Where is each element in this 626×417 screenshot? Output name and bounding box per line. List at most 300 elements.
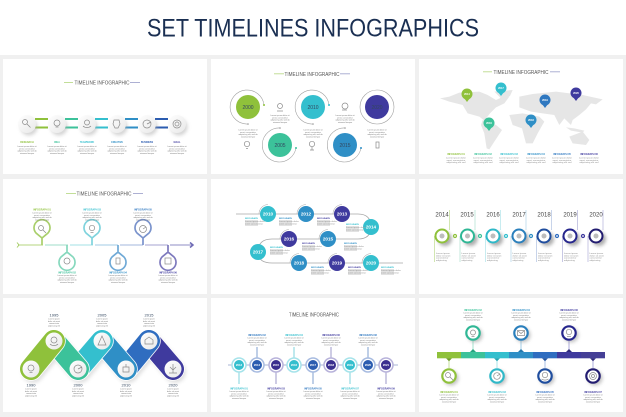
upper text blocks: amet, consectetur — [513, 314, 529, 317]
map text blocks: INFOGRAPH 06 — [580, 153, 599, 156]
pin text blocks: adipiscing elit, sed do — [158, 279, 178, 282]
text blocks — [17, 145, 187, 155]
lower years and text — [25, 382, 179, 397]
ring text blocks: Lorem ipsum — [564, 253, 578, 255]
labels: GOAL — [174, 141, 181, 144]
lower text blocks: eiusmod tempor — [269, 397, 284, 400]
2010 — [301, 95, 325, 119]
2005 — [268, 133, 292, 157]
pin text blocks: Lorem ipsum dolor sit — [133, 212, 153, 214]
lower text blocks: eiusmod tempor — [343, 397, 358, 400]
lower text blocks — [439, 391, 603, 403]
upper years and text: adipiscing elit — [96, 324, 108, 327]
labels: CREATIVE — [111, 141, 123, 144]
upper text blocks: eiusmod tempor — [466, 318, 481, 321]
winding text blocks: amet consectetur — [279, 222, 297, 226]
text blocks: adipiscing elit, sed do — [367, 133, 387, 136]
lower text blocks: Lorem ipsum dolor sit — [303, 390, 323, 393]
ring text blocks: dolor sit amet — [590, 254, 604, 257]
winding text blocks: amet consectetur — [245, 222, 263, 226]
text blocks: Lorem ipsum dolor sit — [270, 114, 290, 117]
text blocks: Lorem ipsum dolor sit — [238, 128, 258, 132]
upper years and text: Lorem ipsum — [143, 318, 155, 320]
nodes — [442, 326, 600, 383]
lower years and text: adipiscing elit — [72, 394, 84, 397]
lower years and text: dolor sit amet — [167, 390, 179, 393]
lower text blocks: eiusmod tempor — [538, 400, 553, 403]
pin text blocks: amet, consectetur — [135, 214, 151, 217]
winding text blocks: Lorem ipsum dolor — [346, 227, 366, 229]
years: 2015 — [460, 212, 474, 218]
winding text blocks: INFOGRAPH — [346, 223, 360, 226]
upper years and text: adipiscing elit — [48, 324, 60, 327]
ring text blocks: dolor sit amet — [436, 254, 451, 257]
map text blocks: amet, consectetur — [580, 159, 599, 162]
2000: 2000 — [242, 105, 254, 111]
2005: 2005 — [274, 143, 286, 149]
upper text blocks: INFOGRAPH 02 — [464, 309, 483, 312]
winding text blocks: Lorem ipsum dolor — [311, 270, 331, 272]
winding text blocks: Lorem ipsum dolor — [302, 246, 322, 248]
year nodes: 2015 — [323, 237, 334, 242]
ring text blocks: adipiscing — [487, 260, 498, 262]
text blocks: Lorem ipsum dolor sit — [335, 114, 355, 117]
panel: year ring timeline — [419, 179, 623, 294]
year nodes: 2013 — [337, 212, 348, 217]
winding text blocks: Lorem ipsum dolor — [279, 221, 299, 223]
vertical guides — [434, 210, 603, 262]
circles — [18, 115, 186, 133]
world map — [440, 90, 603, 149]
rings — [436, 230, 602, 242]
heading: TIMELINE INFOGRAPHIC — [289, 312, 339, 318]
upper years and text: dolor sit amet — [96, 320, 108, 323]
winding path — [236, 214, 403, 263]
panel: nodes with stems timeline — [211, 298, 415, 412]
lower text blocks: INFOGRAPH 03 — [488, 391, 507, 394]
upper years and text: 2015 — [145, 312, 154, 318]
pin text blocks: adipiscing elit, sed do — [57, 279, 77, 282]
map pins: 2014 — [464, 92, 470, 96]
map text blocks: INFOGRAPH 05 — [553, 153, 572, 156]
lower text blocks: adipiscing elit, sed do — [303, 395, 323, 398]
lower text blocks: adipiscing elit, sed do — [535, 398, 555, 401]
lower text blocks: amet, consectetur — [441, 396, 457, 399]
pin labels: INFOGRAPH 05 — [134, 208, 153, 212]
node icons — [446, 329, 596, 380]
text blocks: amet, consectetur — [169, 147, 185, 150]
winding text blocks: Lorem ipsum dolor — [270, 250, 290, 252]
map pins — [462, 82, 582, 131]
upper text blocks: amet, consectetur — [360, 339, 376, 342]
lower years and text: Lorem ipsum — [25, 388, 37, 390]
ring text blocks: consectetur — [436, 257, 449, 260]
lower years and text: dolor sit amet — [120, 390, 132, 393]
upper years and text: consectetur — [144, 322, 155, 325]
map text blocks: Lorem ipsum dolor — [499, 158, 519, 160]
winding text blocks: amet consectetur — [311, 272, 329, 274]
upper years and text: dolor sit amet — [143, 320, 155, 323]
ring text blocks: adipiscing — [512, 260, 524, 262]
text blocks: adipiscing elit, sed do — [270, 119, 290, 122]
ring text blocks: dolor sit amet — [538, 254, 553, 257]
map pins: 2018 — [528, 118, 534, 122]
pin text blocks: adipiscing elit, sed do — [82, 216, 102, 219]
ring text blocks: consectetur — [512, 257, 525, 260]
upper text blocks: Lorem ipsum dolor sit — [284, 336, 304, 340]
map pins: 2019 — [542, 98, 548, 102]
labels — [20, 141, 181, 144]
year nodes — [250, 206, 379, 271]
lower text blocks: INFOGRAPH 01 — [440, 391, 459, 394]
years: 2014 — [435, 212, 449, 218]
text blocks: amet, consectetur — [19, 147, 35, 150]
text blocks: adipiscing elit, sed do — [47, 150, 67, 153]
lower text blocks: amet, consectetur — [537, 396, 553, 399]
icons — [22, 120, 181, 128]
ring text blocks: Lorem ipsum — [590, 253, 603, 255]
panel: world map — [419, 59, 623, 174]
upper years and text — [48, 312, 155, 327]
ring text blocks — [436, 253, 604, 262]
year nodes: 2010 — [263, 212, 274, 217]
ring text blocks: adipiscing — [436, 260, 447, 262]
lower text blocks: Lorem ipsum dolor sit — [487, 394, 507, 396]
2020 — [365, 95, 389, 119]
upper text blocks: INFOGRAPH 04 — [512, 309, 531, 312]
ribbon circles — [22, 332, 182, 378]
pin text blocks: eiusmod tempor — [161, 281, 176, 284]
lower years and text: adipiscing elit — [120, 394, 132, 397]
ring text blocks: consectetur — [564, 257, 577, 260]
map text blocks: INFOGRAPH 04 — [527, 153, 546, 156]
upper text blocks: amet, consectetur — [323, 339, 339, 342]
text blocks: adipiscing elit, sed do — [77, 150, 97, 153]
pin text blocks: amet, consectetur — [59, 276, 75, 279]
winding text blocks: INFOGRAPH — [302, 242, 316, 245]
map text blocks: Lorem ipsum dolor — [473, 158, 493, 160]
lower text blocks: Lorem ipsum dolor sit — [229, 390, 249, 393]
text blocks: Lorem ipsum dolor sit — [107, 145, 127, 148]
map text blocks: adipiscing elit sed — [447, 161, 466, 164]
map text blocks: adipiscing elit sed — [580, 161, 599, 164]
lower text blocks: adipiscing elit, sed do — [229, 395, 249, 398]
winding text blocks — [245, 217, 401, 274]
text blocks: eiusmod tempor — [273, 121, 288, 124]
winding text blocks: amet consectetur — [270, 252, 288, 254]
years: 2016 — [486, 212, 500, 218]
year nodes: 2019 — [332, 261, 343, 266]
pin text blocks — [32, 212, 178, 284]
connector dots — [454, 234, 584, 238]
text blocks: eiusmod tempor — [80, 152, 95, 155]
winding text blocks: amet consectetur — [348, 272, 366, 274]
nodes — [232, 358, 393, 372]
heading: TIMELINE INFOGRAPHIC — [284, 72, 340, 78]
lower text blocks: INFOGRAPH 07 — [341, 388, 360, 390]
upper text blocks: eiusmod tempor — [361, 343, 376, 346]
grey text backing — [245, 220, 394, 275]
years — [435, 212, 603, 218]
pin labels: INFOGRAPH 04 — [109, 272, 128, 274]
text blocks: adipiscing elit, sed do — [167, 150, 187, 153]
ring shadows — [438, 232, 606, 246]
upper text blocks: eiusmod tempor — [250, 343, 265, 346]
pin text blocks: eiusmod tempor — [60, 281, 75, 284]
labels: TEAMWORK — [80, 141, 94, 144]
text blocks: Lorem ipsum dolor sit — [303, 128, 323, 132]
pin labels: INFOGRAPH 02 — [58, 272, 77, 274]
winding text blocks: amet consectetur — [317, 222, 335, 226]
upper years and text: consectetur — [49, 322, 60, 325]
pin labels — [33, 208, 178, 274]
upper text blocks: adipiscing elit, sed do — [321, 341, 341, 344]
lower text blocks: amet, consectetur — [305, 392, 321, 395]
winding text blocks: Lorem ipsum dolor — [381, 270, 401, 272]
map text blocks: adipiscing elit sed — [553, 161, 572, 164]
pin text blocks: amet, consectetur — [34, 214, 50, 217]
text blocks: adipiscing elit, sed do — [107, 150, 127, 153]
text blocks: amet, consectetur — [305, 131, 321, 134]
ring text blocks: Lorem ipsum — [436, 253, 450, 255]
lower text blocks: adipiscing elit, sed do — [439, 398, 459, 401]
upper years and text: adipiscing elit — [143, 324, 155, 327]
ring arcs — [230, 90, 394, 162]
text blocks: eiusmod tempor — [306, 135, 321, 138]
lower text blocks: INFOGRAPH 07 — [584, 391, 603, 394]
labels: BUSINESS — [141, 141, 154, 144]
map text blocks: INFOGRAPH 03 — [500, 153, 519, 156]
lower text blocks: amet, consectetur — [489, 396, 505, 399]
lower text blocks: eiusmod tempor — [232, 397, 247, 400]
lower text blocks: Lorem ipsum dolor sit — [439, 394, 459, 396]
lower text blocks: INFOGRAPH 09 — [377, 388, 396, 390]
map text blocks: Lorem ipsum dolor — [446, 158, 466, 160]
stems — [449, 341, 593, 368]
upper text blocks: amet, consectetur — [286, 339, 302, 342]
upper text blocks: INFOGRAPH 06 — [560, 309, 579, 312]
upper text blocks: Lorem ipsum dolor sit — [247, 336, 267, 340]
2010: 2010 — [307, 105, 319, 111]
nodes: 2019 — [347, 363, 354, 367]
upper text blocks: INFOGRAPH 06 — [322, 334, 341, 337]
upper text blocks: adipiscing elit, sed do — [247, 341, 267, 344]
winding text blocks: INFOGRAPH — [344, 242, 358, 245]
winding text blocks: Lorem ipsum dolor — [348, 270, 368, 272]
map text blocks: Lorem ipsum dolor — [552, 158, 572, 160]
winding text blocks: INFOGRAPH — [245, 217, 259, 220]
pin text blocks: Lorem ipsum dolor sit — [108, 274, 128, 277]
2015 — [333, 133, 357, 157]
lower text blocks: Lorem ipsum dolor sit — [535, 394, 555, 396]
lower years and text: consectetur — [168, 392, 179, 395]
map text blocks: amet, consectetur — [553, 159, 572, 162]
map text blocks: Lorem ipsum dolor — [526, 158, 546, 160]
map text blocks — [446, 153, 599, 164]
upper years and text: 2005 — [98, 312, 107, 318]
years: 2019 — [563, 212, 577, 218]
map text blocks: Lorem ipsum dolor — [579, 158, 599, 160]
map text blocks: adipiscing elit sed — [527, 161, 546, 164]
lower years and text: adipiscing elit — [25, 394, 37, 397]
upper years and text: consectetur — [97, 322, 108, 325]
winding text blocks: INFOGRAPH — [348, 266, 362, 269]
panel: circles and connectors timeline — [3, 59, 207, 174]
year nodes: 2014 — [366, 225, 377, 230]
axis and stems — [228, 347, 398, 384]
icons — [244, 103, 379, 150]
text blocks: amet, consectetur — [139, 147, 155, 150]
winding text blocks: Lorem ipsum dolor — [317, 221, 337, 223]
lower text blocks: eiusmod tempor — [379, 397, 394, 400]
text blocks: amet, consectetur — [272, 116, 288, 119]
map text blocks: amet, consectetur — [527, 159, 546, 162]
map pins: 2020 — [573, 91, 579, 95]
ribbon shadow — [33, 344, 175, 372]
winding text blocks: amet consectetur — [344, 248, 362, 250]
text blocks: adipiscing elit, sed do — [303, 133, 323, 136]
nodes: 2016 — [291, 363, 298, 367]
upper text blocks: Lorem ipsum dolor sit — [559, 312, 579, 314]
map text blocks: amet, consectetur — [447, 159, 466, 162]
pins — [34, 220, 176, 270]
upper text blocks: eiusmod tempor — [514, 318, 529, 321]
upper text blocks: Lorem ipsum dolor sit — [463, 312, 483, 314]
map pins: 2016 — [486, 121, 492, 125]
ring text blocks: consectetur — [538, 257, 551, 260]
lower text blocks: Lorem ipsum dolor sit — [340, 390, 360, 393]
upper text blocks: adipiscing elit, sed do — [559, 316, 579, 319]
nodes: 2020 — [365, 363, 372, 367]
ring text blocks: adipiscing — [462, 260, 473, 262]
pin text blocks: eiusmod tempor — [35, 218, 50, 221]
arc end dots — [247, 104, 362, 149]
2015: 2015 — [339, 143, 351, 149]
text blocks: Lorem ipsum dolor sit — [77, 145, 97, 148]
lower text blocks: INFOGRAPH 05 — [536, 391, 555, 394]
lower years and text: Lorem ipsum — [120, 388, 132, 390]
text blocks: adipiscing elit, sed do — [137, 150, 157, 153]
lower text blocks: eiusmod tempor — [442, 400, 457, 403]
lower years and text: Lorem ipsum — [167, 388, 179, 390]
panel: zigzag ribbon timeline — [3, 298, 207, 412]
upper text blocks: Lorem ipsum dolor sit — [321, 336, 341, 340]
pin text blocks: amet, consectetur — [84, 214, 100, 217]
text blocks: adipiscing elit, sed do — [17, 150, 37, 153]
upper text blocks: eiusmod tempor — [287, 343, 302, 346]
upper text blocks: amet, consectetur — [465, 314, 481, 317]
lower years and text: adipiscing elit — [167, 394, 179, 397]
upper text blocks: adipiscing elit, sed do — [511, 316, 531, 319]
arrow line — [17, 242, 193, 248]
nodes: 2018 — [328, 363, 335, 367]
upper text blocks: amet, consectetur — [249, 339, 265, 342]
nodes: 2014 — [254, 363, 261, 367]
ring text blocks: consectetur — [462, 257, 474, 260]
year nodes: 2020 — [366, 261, 377, 266]
text blocks: adipiscing elit, sed do — [335, 119, 355, 122]
lower text blocks: INFOGRAPH 03 — [267, 388, 286, 390]
labels: RESEARCH — [20, 141, 34, 144]
lower text blocks: amet, consectetur — [585, 396, 601, 399]
upper text blocks: adipiscing elit, sed do — [358, 341, 378, 344]
text blocks: amet, consectetur — [79, 147, 95, 150]
year nodes: 2012 — [301, 212, 312, 217]
ring text blocks: consectetur — [590, 257, 602, 260]
lower text blocks: amet, consectetur — [231, 392, 247, 395]
ring text blocks: dolor sit amet — [462, 254, 476, 257]
panel: year circles with arcs — [211, 59, 415, 174]
pin text blocks: Lorem ipsum dolor sit — [32, 212, 52, 214]
years: 2020 — [589, 212, 603, 218]
2020: 2020 — [371, 105, 383, 111]
text blocks: Lorem ipsum dolor sit — [47, 145, 67, 148]
upper years and text: Lorem ipsum — [48, 318, 60, 320]
pin text blocks: Lorem ipsum dolor sit — [82, 212, 102, 214]
lower text blocks: Lorem ipsum dolor sit — [266, 390, 286, 393]
panel: pin timeline — [3, 179, 207, 294]
winding text blocks: INFOGRAPH — [317, 217, 331, 220]
heading: TIMELINE INFOGRAPHIC — [74, 80, 130, 86]
text blocks: Lorem ipsum dolor sit — [17, 145, 37, 148]
lower text blocks: amet, consectetur — [268, 392, 284, 395]
year nodes: 2017 — [253, 250, 264, 255]
text blocks: eiusmod tempor — [110, 152, 125, 155]
ring icons — [440, 234, 598, 238]
lower text blocks: INFOGRAPH 05 — [304, 388, 323, 390]
pin text blocks: adipiscing elit, sed do — [108, 279, 128, 282]
pin text blocks: adipiscing elit, sed do — [133, 216, 153, 219]
year nodes: 2018 — [294, 261, 305, 266]
upper years and text: 1995 — [50, 312, 59, 318]
text blocks: Lorem ipsum dolor sit — [367, 128, 387, 132]
map text blocks: adipiscing elit sed — [500, 161, 519, 164]
panel: winding path timeline — [211, 179, 415, 294]
pin text blocks: Lorem ipsum dolor sit — [158, 274, 178, 277]
upper text blocks — [247, 334, 378, 346]
winding text blocks: Lorem ipsum dolor — [344, 246, 364, 248]
winding text blocks: INFOGRAPH — [311, 266, 325, 269]
winding text blocks: amet consectetur — [381, 272, 399, 274]
pin text blocks: eiusmod tempor — [85, 218, 100, 221]
pin labels: INFOGRAPH 01 — [33, 208, 52, 212]
text blocks: eiusmod tempor — [241, 135, 256, 138]
map pins: 2017 — [498, 86, 504, 90]
text blocks: eiusmod tempor — [338, 121, 353, 124]
text blocks: Lorem ipsum dolor sit — [137, 145, 157, 148]
winding text blocks: INFOGRAPH — [381, 266, 395, 269]
lower years and text: dolor sit amet — [25, 390, 37, 393]
pin icons — [38, 225, 171, 264]
lower years and text: Lorem ipsum — [72, 388, 84, 390]
text blocks: amet, consectetur — [240, 131, 256, 134]
upper text blocks: INFOGRAPH 02 — [248, 334, 267, 337]
pin text blocks: amet, consectetur — [110, 276, 126, 279]
map text blocks: adipiscing elit sed — [474, 161, 493, 164]
lower text blocks: amet, consectetur — [378, 392, 394, 395]
lower text blocks: adipiscing elit, sed do — [583, 398, 603, 401]
lower years and text: consectetur — [73, 392, 84, 395]
lower years and text: dolor sit amet — [72, 390, 84, 393]
upper years and text: Lorem ipsum — [96, 318, 108, 320]
winding text blocks: Lorem ipsum dolor — [245, 221, 265, 223]
upper text blocks: adipiscing elit, sed do — [463, 316, 483, 319]
ring text blocks: Lorem ipsum — [512, 253, 526, 255]
upper text blocks: Lorem ipsum dolor sit — [358, 336, 378, 340]
text blocks: amet, consectetur — [49, 147, 65, 150]
map text blocks: amet, consectetur — [500, 159, 519, 162]
panel: colour bar timeline — [419, 298, 623, 412]
